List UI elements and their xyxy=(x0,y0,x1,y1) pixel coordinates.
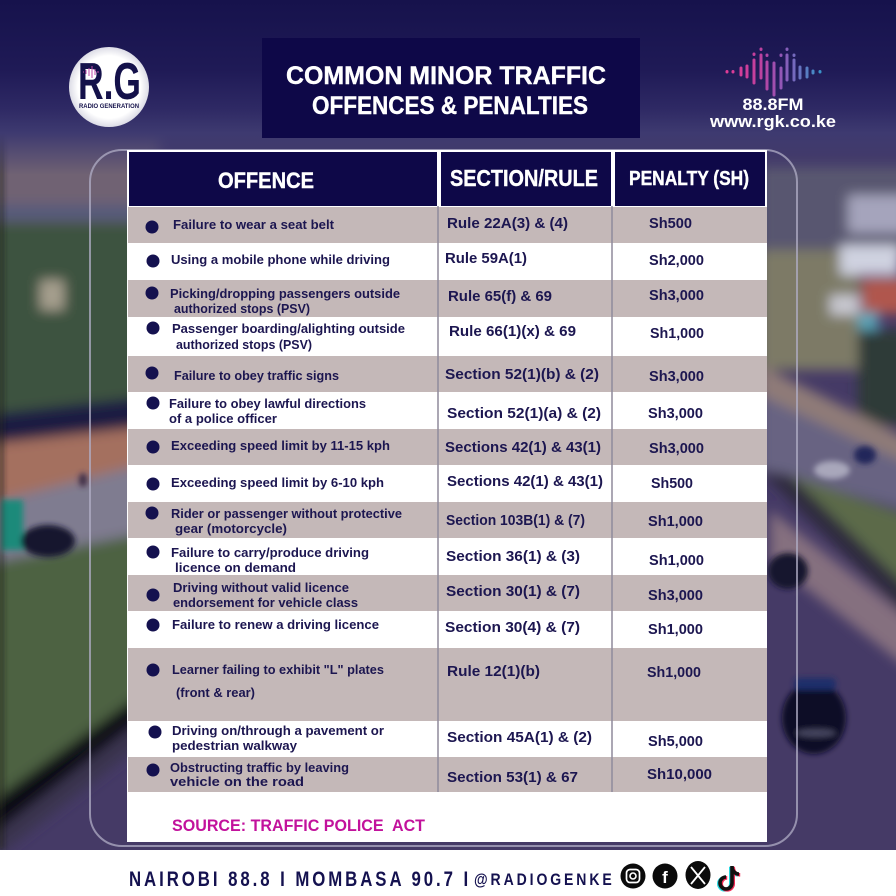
offence column text: Failure to obey lawful directions xyxy=(169,397,366,411)
icon: sound wave and station details xyxy=(709,49,836,131)
icon: facebook xyxy=(652,864,678,888)
title banner: OFFENCES & PENALTIES xyxy=(312,92,588,120)
penalty column text: Sh1,000 xyxy=(648,622,703,638)
penalty column text: Sh500 xyxy=(651,476,693,492)
offence column text: authorized stops (PSV) xyxy=(174,302,310,316)
offence column text: endorsement for vehicle class xyxy=(173,596,358,610)
penalty column text: Sh3,000 xyxy=(649,288,704,304)
table header: PENALTY (SH) xyxy=(629,168,749,190)
section/rule column text: Section 45A(1) & (2) xyxy=(447,730,592,746)
title banner: COMMON MINOR TRAFFIC xyxy=(286,62,606,90)
penalty column text xyxy=(647,216,712,783)
section/rule column text: Section 30(4) & (7) xyxy=(445,620,580,636)
penalty column text: Sh3,000 xyxy=(649,369,704,385)
offence column text: licence on demand xyxy=(175,561,296,575)
footer bar xyxy=(0,850,896,896)
section/rule column text: Section 52(1)(a) & (2) xyxy=(447,406,601,422)
offence column text: Driving on/through a pavement or xyxy=(172,724,384,738)
icon: sound wave and station details: www.rgk.co.ke xyxy=(709,112,836,131)
offence column text: Failure to obey traffic signs xyxy=(174,369,339,383)
offence column text: vehicle on the road xyxy=(170,775,304,789)
source note: SOURCE: TRAFFIC POLICE ACT xyxy=(172,816,426,835)
offence column text: Exceeding speed limit by 11-15 kph xyxy=(171,439,390,453)
section/rule column text: Rule 66(1)(x) & 69 xyxy=(449,324,576,340)
penalty column text: Sh500 xyxy=(649,216,692,232)
title banner xyxy=(262,38,640,138)
icon: sound wave and station details: 88.8FM xyxy=(742,95,804,114)
icon: tiktok xyxy=(719,866,740,890)
section/rule column text: Section 30(1) & (7) xyxy=(446,584,580,600)
column dividers xyxy=(438,206,612,792)
penalty column text: Sh1,000 xyxy=(649,553,704,569)
section/rule column text: Section 103B(1) & (7) xyxy=(446,513,585,529)
offence column text xyxy=(169,218,405,789)
penalty column text: Sh1,000 xyxy=(650,326,704,342)
row stripes xyxy=(128,207,767,792)
section/rule column text: Sections 42(1) & 43(1) xyxy=(447,474,603,490)
penalty column text: Sh1,000 xyxy=(647,665,701,681)
section/rule column text: Sections 42(1) & 43(1) xyxy=(445,440,601,456)
offence column text: authorized stops (PSV) xyxy=(176,338,312,352)
table panel xyxy=(127,150,767,842)
section/rule column text xyxy=(445,216,603,786)
section/rule column text: Rule 22A(3) & (4) xyxy=(447,216,568,232)
offence column text: Exceeding speed limit by 6-10 kph xyxy=(171,476,384,490)
section/rule column text: Rule 65(f) & 69 xyxy=(448,289,552,305)
penalty column text: Sh10,000 xyxy=(647,767,712,783)
section/rule column text: Section 36(1) & (3) xyxy=(446,549,580,565)
icon: facebook: f xyxy=(662,868,668,887)
logo: Radio Generation: R.G xyxy=(78,53,141,111)
offence column text: Rider or passenger without protective xyxy=(171,507,402,521)
offence column text: (front & rear) xyxy=(176,686,255,700)
offence column text: Failure to carry/produce driving xyxy=(171,546,369,560)
offence column text: Driving without valid licence xyxy=(173,581,349,595)
offence column text: Learner failing to exhibit "L" plates xyxy=(172,663,384,677)
section/rule column text: Section 53(1) & 67 xyxy=(447,770,578,786)
section/rule column text: Section 52(1)(b) & (2) xyxy=(445,367,599,383)
table header: OFFENCE xyxy=(218,168,314,193)
offence column text: Passenger boarding/alighting outside xyxy=(172,322,405,336)
table header: SECTION/RULE xyxy=(450,165,598,191)
offence column text: gear (motorcycle) xyxy=(175,522,287,536)
penalty column text: Sh3,000 xyxy=(648,588,703,604)
offence column text: Failure to wear a seat belt xyxy=(173,218,335,232)
penalty column text: Sh2,000 xyxy=(649,253,704,269)
penalty column text: Sh3,000 xyxy=(648,406,703,422)
section/rule column text: Rule 12(1)(b) xyxy=(447,664,540,680)
section/rule column text: Rule 59A(1) xyxy=(445,251,527,267)
penalty column text: Sh5,000 xyxy=(648,734,703,750)
table header xyxy=(129,152,765,206)
penalty column text: Sh1,000 xyxy=(648,514,703,530)
logo: Radio Generation: RADIO GENERATION xyxy=(79,103,139,110)
offence column text: Picking/dropping passengers outside xyxy=(170,287,400,301)
footer bar: @RADIOGENKE xyxy=(474,871,612,889)
footer bar: NAIROBI 88.8 I MOMBASA 90.7 I xyxy=(129,868,468,892)
icon: X xyxy=(686,861,710,889)
offence column text: Obstructing traffic by leaving xyxy=(170,761,349,775)
penalty column text: Sh3,000 xyxy=(649,441,704,457)
bullets xyxy=(146,220,162,776)
offence column text: Using a mobile phone while driving xyxy=(171,253,390,267)
rounded frame outline xyxy=(90,150,797,846)
logo: Radio Generation xyxy=(69,47,149,127)
icon: instagram xyxy=(620,864,646,888)
offence column text: of a police officer xyxy=(169,412,277,426)
offence column text: pedestrian walkway xyxy=(172,739,297,753)
offence column text: Failure to renew a driving licence xyxy=(172,618,379,632)
